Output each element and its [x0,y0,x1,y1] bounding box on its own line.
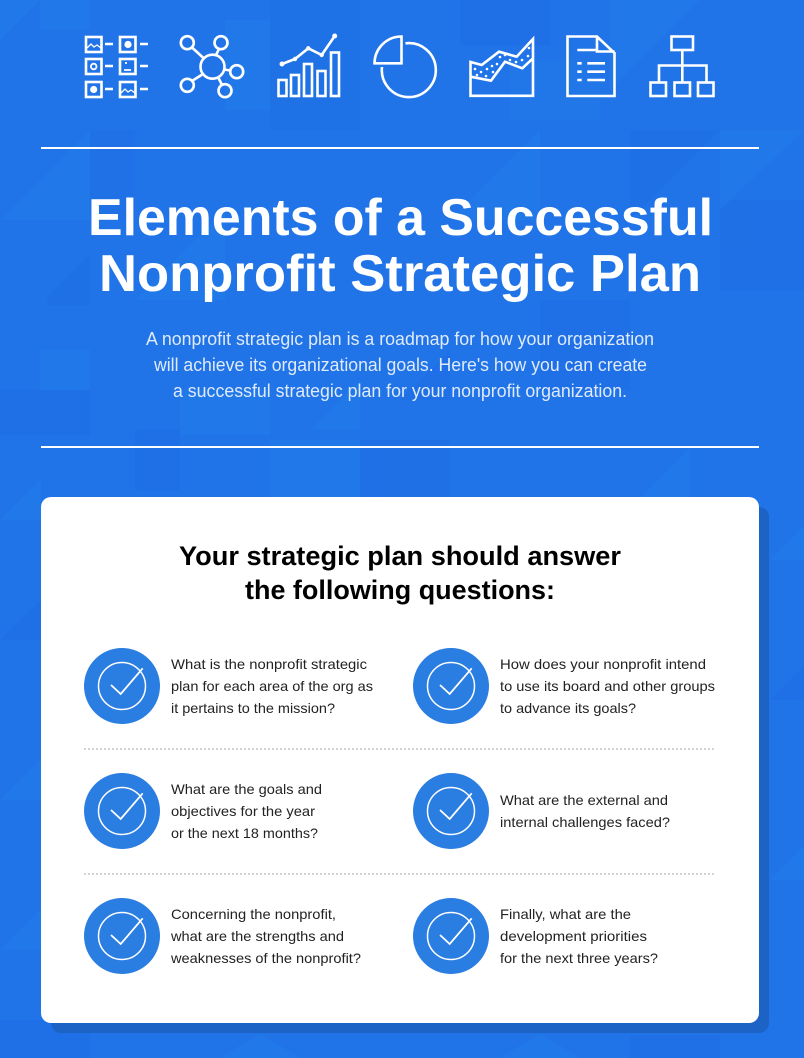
divider: lower rule [41,446,759,448]
card heading: the following questions: [245,575,555,605]
question 2: How does your nonprofit intend [500,656,706,672]
question 5: Concerning the nonprofit, [171,906,336,922]
question 1: What is the nonprofit strategic [171,656,367,672]
question 5: what are the strengths and [170,928,344,944]
question 3: What are the goals and [171,781,322,797]
question 1: plan for each area of the org as [171,678,373,694]
question 2 [413,648,715,724]
question 3: or the next 18 months? [171,825,318,841]
question 3 [84,773,322,849]
icon: document list [568,36,614,96]
icon: checklist of images [86,37,148,97]
question 4 [413,773,670,849]
question 1 [84,648,373,724]
icon: bar and line chart [278,34,339,96]
title [88,189,713,303]
question 2: to advance its goals? [500,700,636,716]
intro text [146,329,654,401]
card shadow [51,507,769,1033]
title: Elements of a Successful [88,189,713,247]
question 5: weaknesses of the nonprofit? [170,950,361,966]
question 6: for the next three years? [500,950,658,966]
question 2: to use its board and other groups [500,678,715,694]
intro text: A nonprofit strategic plan is a roadmap for how your organization [146,329,654,349]
panel: questions card [41,497,759,1023]
question 6: Finally, what are the [500,906,631,922]
intro text: a successful strategic plan for your nonprofit organization. [173,381,627,401]
icon: network nodes [181,36,243,97]
divider: top rule [41,147,759,149]
question 4: What are the external and [500,792,668,808]
icon: area chart [470,39,533,96]
icon: pie chart [374,36,436,97]
question 3: objectives for the year [171,803,315,819]
title: Nonprofit Strategic Plan [99,245,701,303]
question 5 [84,898,361,974]
question 6 [413,898,658,974]
card heading [179,541,621,605]
question 6: development priorities [500,928,647,944]
card heading: Your strategic plan should answer [179,541,621,571]
icon row [86,34,714,97]
intro text: will achieve its organizational goals. Here's how you can create [153,355,647,375]
icon: org chart [650,36,714,96]
question 1: it pertains to the mission? [171,700,335,716]
question 4: internal challenges faced? [500,814,670,830]
